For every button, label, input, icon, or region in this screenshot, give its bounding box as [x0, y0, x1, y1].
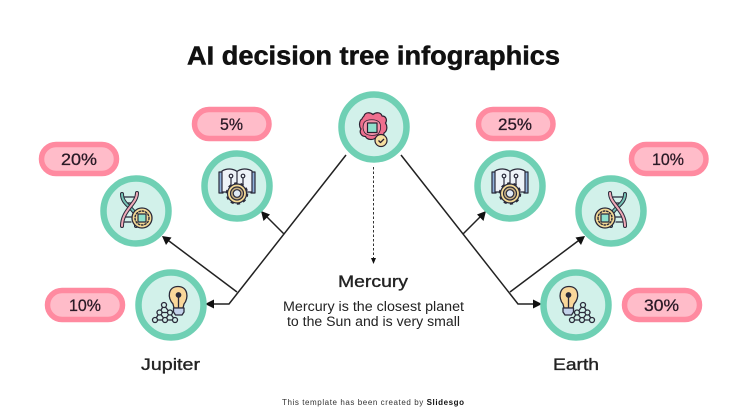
icon: DNA with chip	[595, 193, 625, 228]
pill: 25%: 25%	[498, 115, 532, 134]
pill: right 10%	[632, 144, 706, 174]
arrow: branch to right 10% node	[510, 236, 585, 292]
arrow: dashed line to Mercury	[371, 167, 376, 264]
icon: brain flower with check	[360, 113, 387, 146]
pill: 5%	[194, 110, 269, 138]
label: Earth: Earth	[553, 356, 599, 374]
pill: 5%: 5%	[220, 115, 243, 134]
node: left 20% circle	[104, 178, 168, 244]
node: top root circle	[342, 94, 406, 160]
pill: left 10%	[48, 290, 122, 320]
heading: Mercury: Mercury	[338, 273, 409, 291]
icon: DNA with chip	[122, 193, 152, 228]
pill: 25%	[478, 110, 553, 138]
icon: light bulb with network	[560, 286, 594, 322]
node: right 25% circle	[478, 154, 542, 218]
icon: book with gear	[492, 169, 528, 203]
text block: Mercury description	[283, 299, 464, 329]
pill: right 10%: 10%	[652, 150, 684, 169]
arrow: branch to 20% node	[162, 236, 237, 292]
node: Earth circle	[544, 272, 608, 338]
pill: 30%	[624, 290, 700, 320]
node: Jupiter circle	[138, 272, 204, 338]
text block: Mercury description: Mercury is the closest planet	[283, 299, 464, 314]
pill: 20%: 20%	[61, 150, 97, 169]
icon: book with gear	[219, 169, 255, 203]
node: left 5% circle	[204, 154, 270, 218]
arrow: left main branch to Jupiter	[205, 155, 346, 308]
label: Jupiter: Jupiter	[141, 356, 201, 374]
pill: 30%: 30%	[644, 296, 679, 315]
arrow: branch to 5% node	[261, 211, 284, 234]
pill: 20%	[42, 144, 116, 174]
arrow: right main branch to Earth	[401, 155, 542, 308]
arrow: branch to 25% node	[463, 211, 486, 234]
icon: light bulb with network	[152, 286, 187, 322]
title: AI decision tree infographics	[187, 42, 560, 70]
node: right 10% circle	[578, 178, 644, 244]
pill: left 10%: 10%	[69, 296, 101, 315]
text block: Mercury description: to the Sun and is very small	[287, 314, 460, 329]
footer credit: This template has been created by Slidesgo	[282, 398, 464, 407]
